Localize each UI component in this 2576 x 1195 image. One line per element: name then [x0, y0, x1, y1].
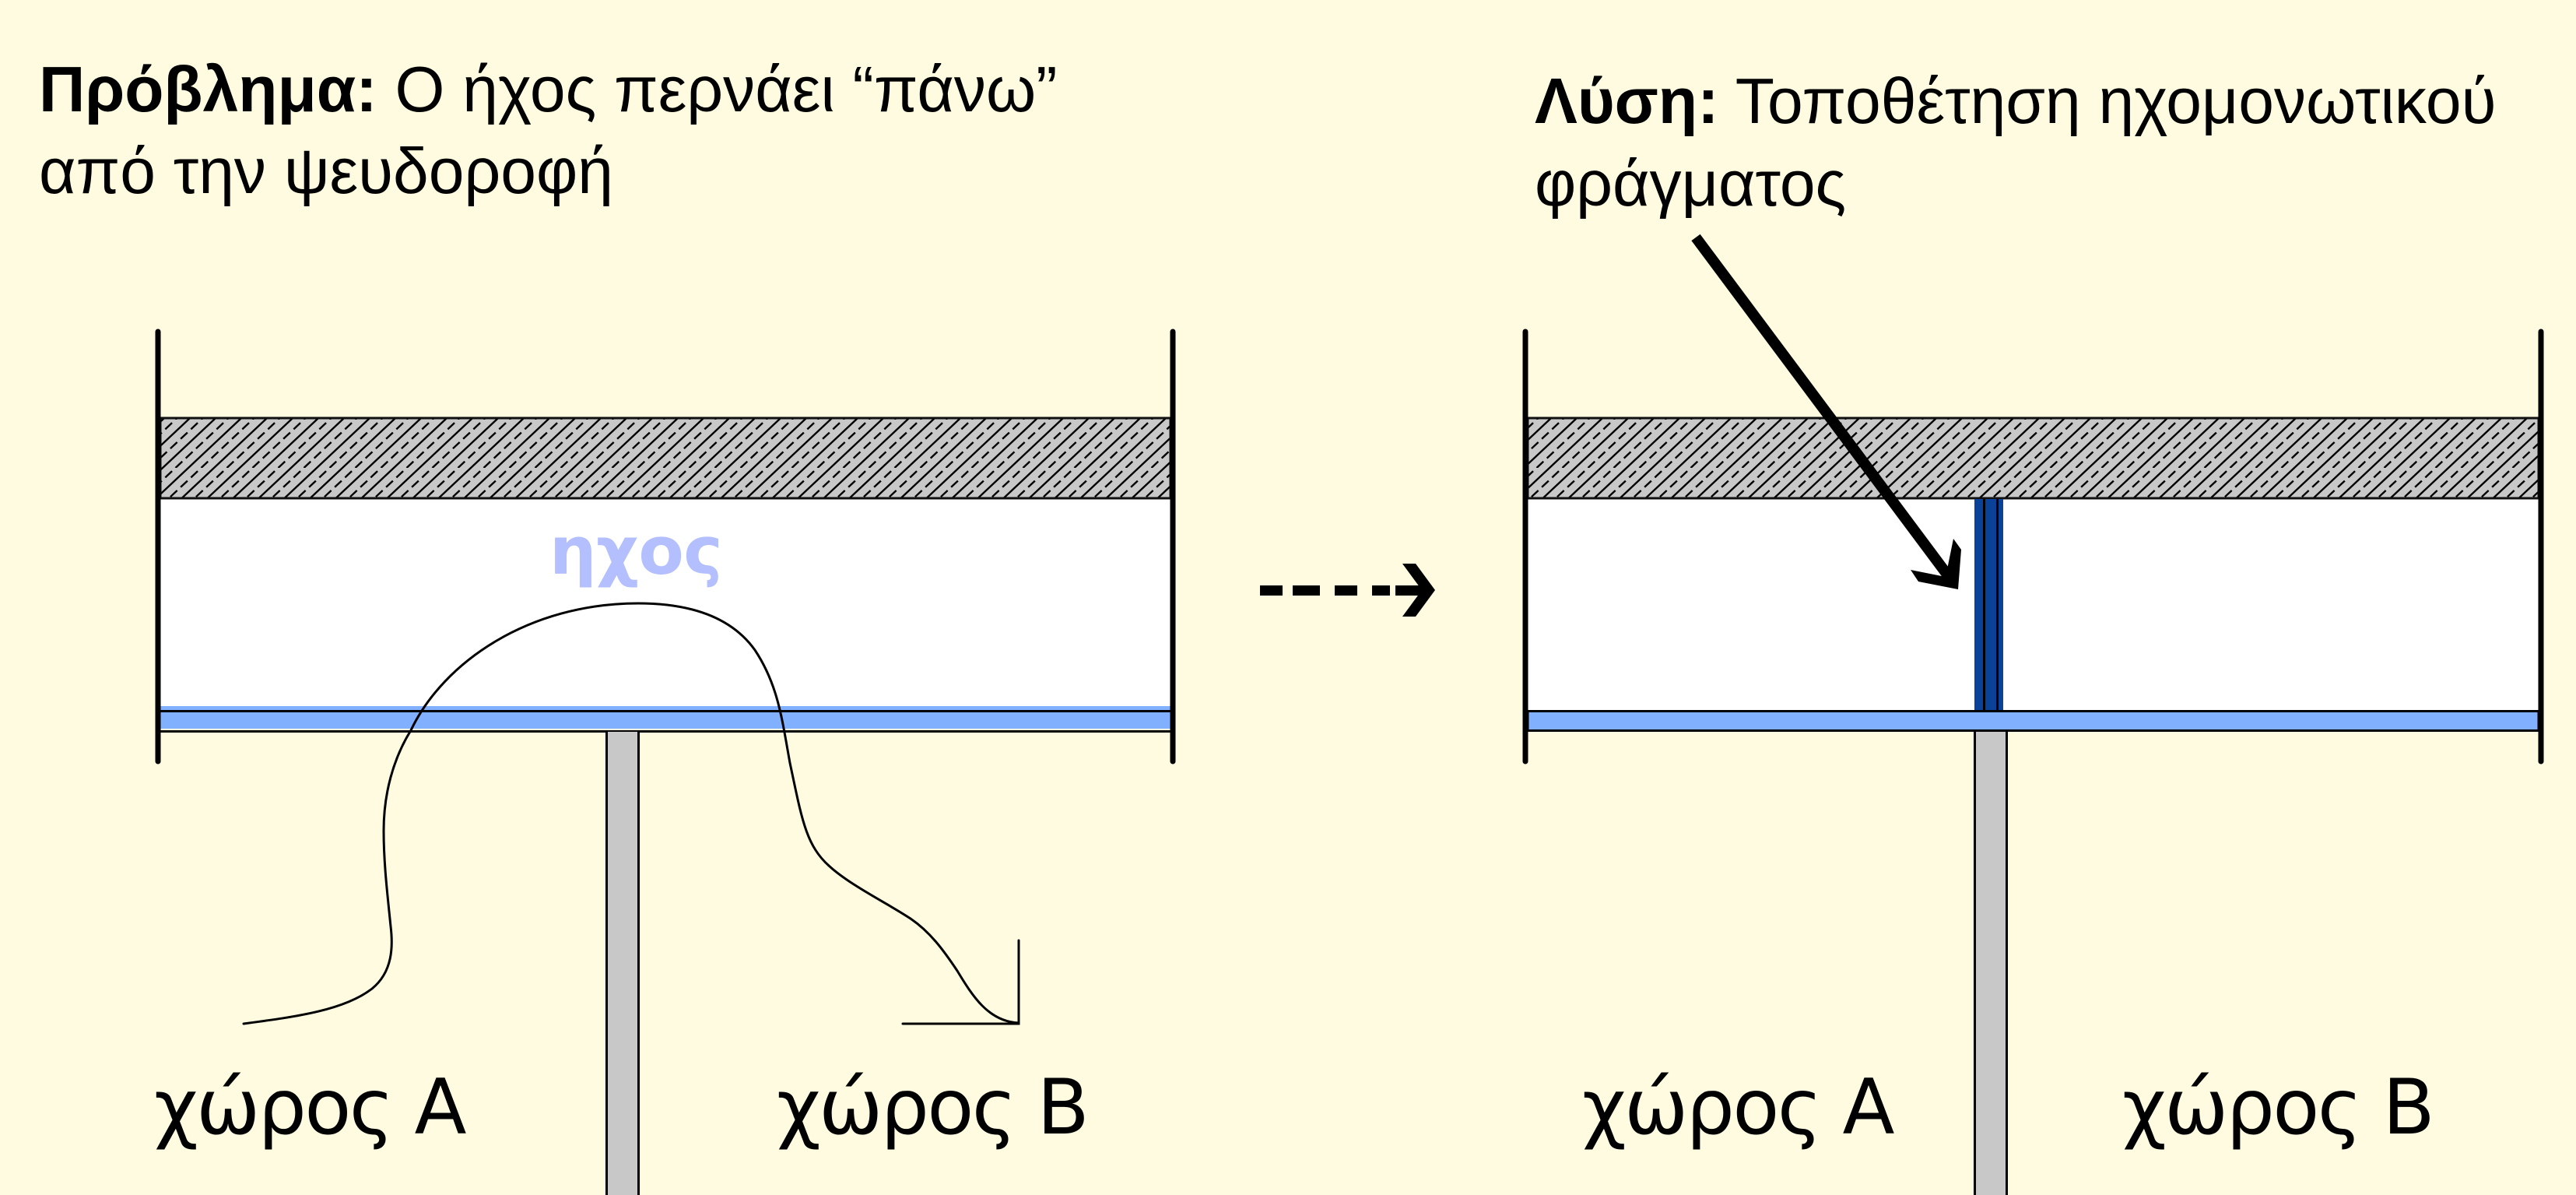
right wall	[2539, 332, 2543, 761]
soundproof barrier	[1974, 499, 2003, 710]
corner mark at end of sound path	[903, 940, 1019, 1024]
room interior	[160, 498, 1170, 708]
ceiling slab hatched	[1528, 418, 2539, 498]
panel: solution diagram	[1525, 237, 2541, 1195]
left wall	[156, 332, 160, 761]
partition wall	[605, 732, 640, 1195]
partition wall	[1974, 732, 2008, 1195]
room interior	[1528, 498, 2539, 711]
sound label: ηχος	[549, 513, 722, 590]
suspended ceiling panel	[160, 706, 1170, 733]
left wall	[1522, 332, 1528, 761]
arrow: problem to solution	[1260, 564, 1435, 617]
heading: problem: από την ψευδοροφή	[39, 136, 613, 207]
label: room A: χώρος Α	[1582, 1063, 1895, 1152]
label: room A: χώρος Α	[154, 1063, 467, 1152]
suspended ceiling panel	[1528, 712, 2539, 730]
heading: problem	[39, 54, 1058, 207]
heading: solution: φράγματος	[1535, 149, 1846, 220]
heading: problem: Πρόβλημα: Ο ήχος περνάει “πάνω”	[39, 54, 1058, 125]
right wall	[1170, 332, 1175, 761]
ceiling slab hatched	[160, 418, 1170, 498]
label: room B: χώρος Β	[777, 1063, 1087, 1152]
label: room B: χώρος Β	[2122, 1063, 2433, 1152]
sound path curve	[244, 603, 1019, 1024]
heading: solution	[1535, 66, 2497, 220]
arrow pointing to barrier	[1696, 237, 1961, 589]
heading: solution: Λύση: Τοποθέτηση ηχομονωτικού	[1535, 66, 2497, 137]
panel: problem diagram	[154, 332, 1173, 1195]
